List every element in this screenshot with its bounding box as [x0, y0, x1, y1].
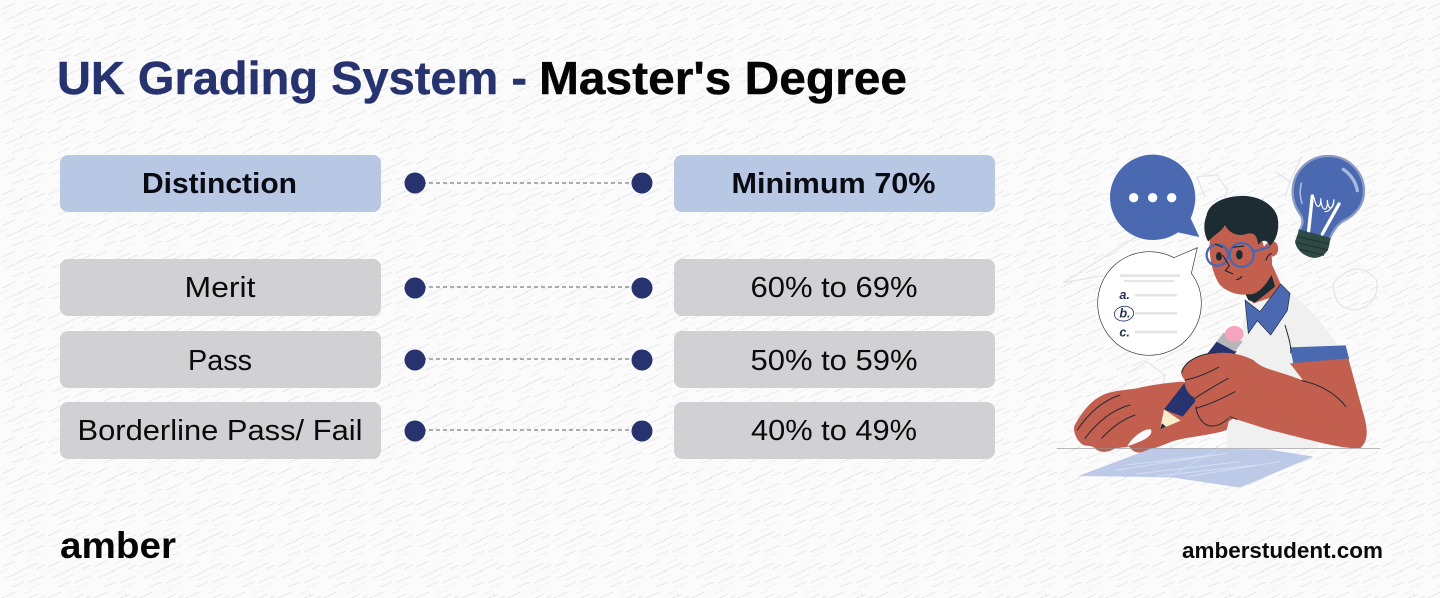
value box: 50% to 59%: [674, 331, 995, 388]
shirt collar: [1245, 284, 1290, 335]
label box: Borderline Pass/ Fail: [60, 402, 381, 459]
row: Pass: [60, 331, 995, 388]
website url: amberstudent.com: [1182, 538, 1383, 563]
icon: answer speech bubble a b c: a.: [1119, 288, 1130, 302]
logo: amber: amber: [60, 525, 176, 566]
icon: speech bubble with dots: [1110, 155, 1199, 240]
label box: Distinction: Distinction: [142, 168, 297, 200]
table line: [1057, 447, 1380, 449]
icon: pencil: [1160, 326, 1244, 429]
value box: 50% to 59%: 50% to 59%: [750, 345, 918, 377]
illustration: student answering a question: [1057, 155, 1380, 488]
label box: Distinction: [60, 155, 381, 212]
connector: [404, 420, 652, 442]
value box: Minimum 70%: Minimum 70%: [732, 168, 936, 200]
label box: Merit: [60, 259, 381, 316]
value box: Minimum 70%: [674, 155, 995, 212]
value box: 40% to 49%: 40% to 49%: [751, 415, 917, 447]
student shirt: [1227, 290, 1349, 448]
student head and neck: [1204, 196, 1281, 303]
label box: Merit: Merit: [184, 272, 256, 304]
value box: 60% to 69%: [674, 259, 995, 316]
row: Merit: [60, 259, 995, 316]
label box: Borderline Pass/ Fail: Borderline Pass/ Fail: [78, 415, 362, 447]
icon: answer speech bubble a b c: b.: [1119, 307, 1131, 321]
row: Distinction: [60, 155, 995, 212]
title: Master's Degree: [539, 52, 907, 104]
value box: 40% to 49%: [674, 402, 995, 459]
student left arm and hand: [1074, 382, 1230, 453]
label box: Pass: Pass: [188, 345, 252, 377]
connector: [404, 278, 652, 298]
icon: answer speech bubble a b c: c.: [1119, 325, 1130, 339]
open notebook: [1078, 448, 1313, 488]
student right arm and hand: [1181, 353, 1367, 448]
connector: [404, 172, 652, 194]
title: [57, 52, 907, 104]
row: Borderline Pass/ Fail: [60, 402, 995, 459]
faint background doodles: [1063, 157, 1377, 385]
label box: Pass: [60, 331, 381, 388]
value box: 60% to 69%: 60% to 69%: [750, 272, 918, 304]
icon: light bulb: [1293, 156, 1364, 258]
connector: [404, 350, 652, 370]
icon: answer speech bubble a b c: [1098, 248, 1201, 355]
title: UK Grading System -: [57, 52, 527, 104]
